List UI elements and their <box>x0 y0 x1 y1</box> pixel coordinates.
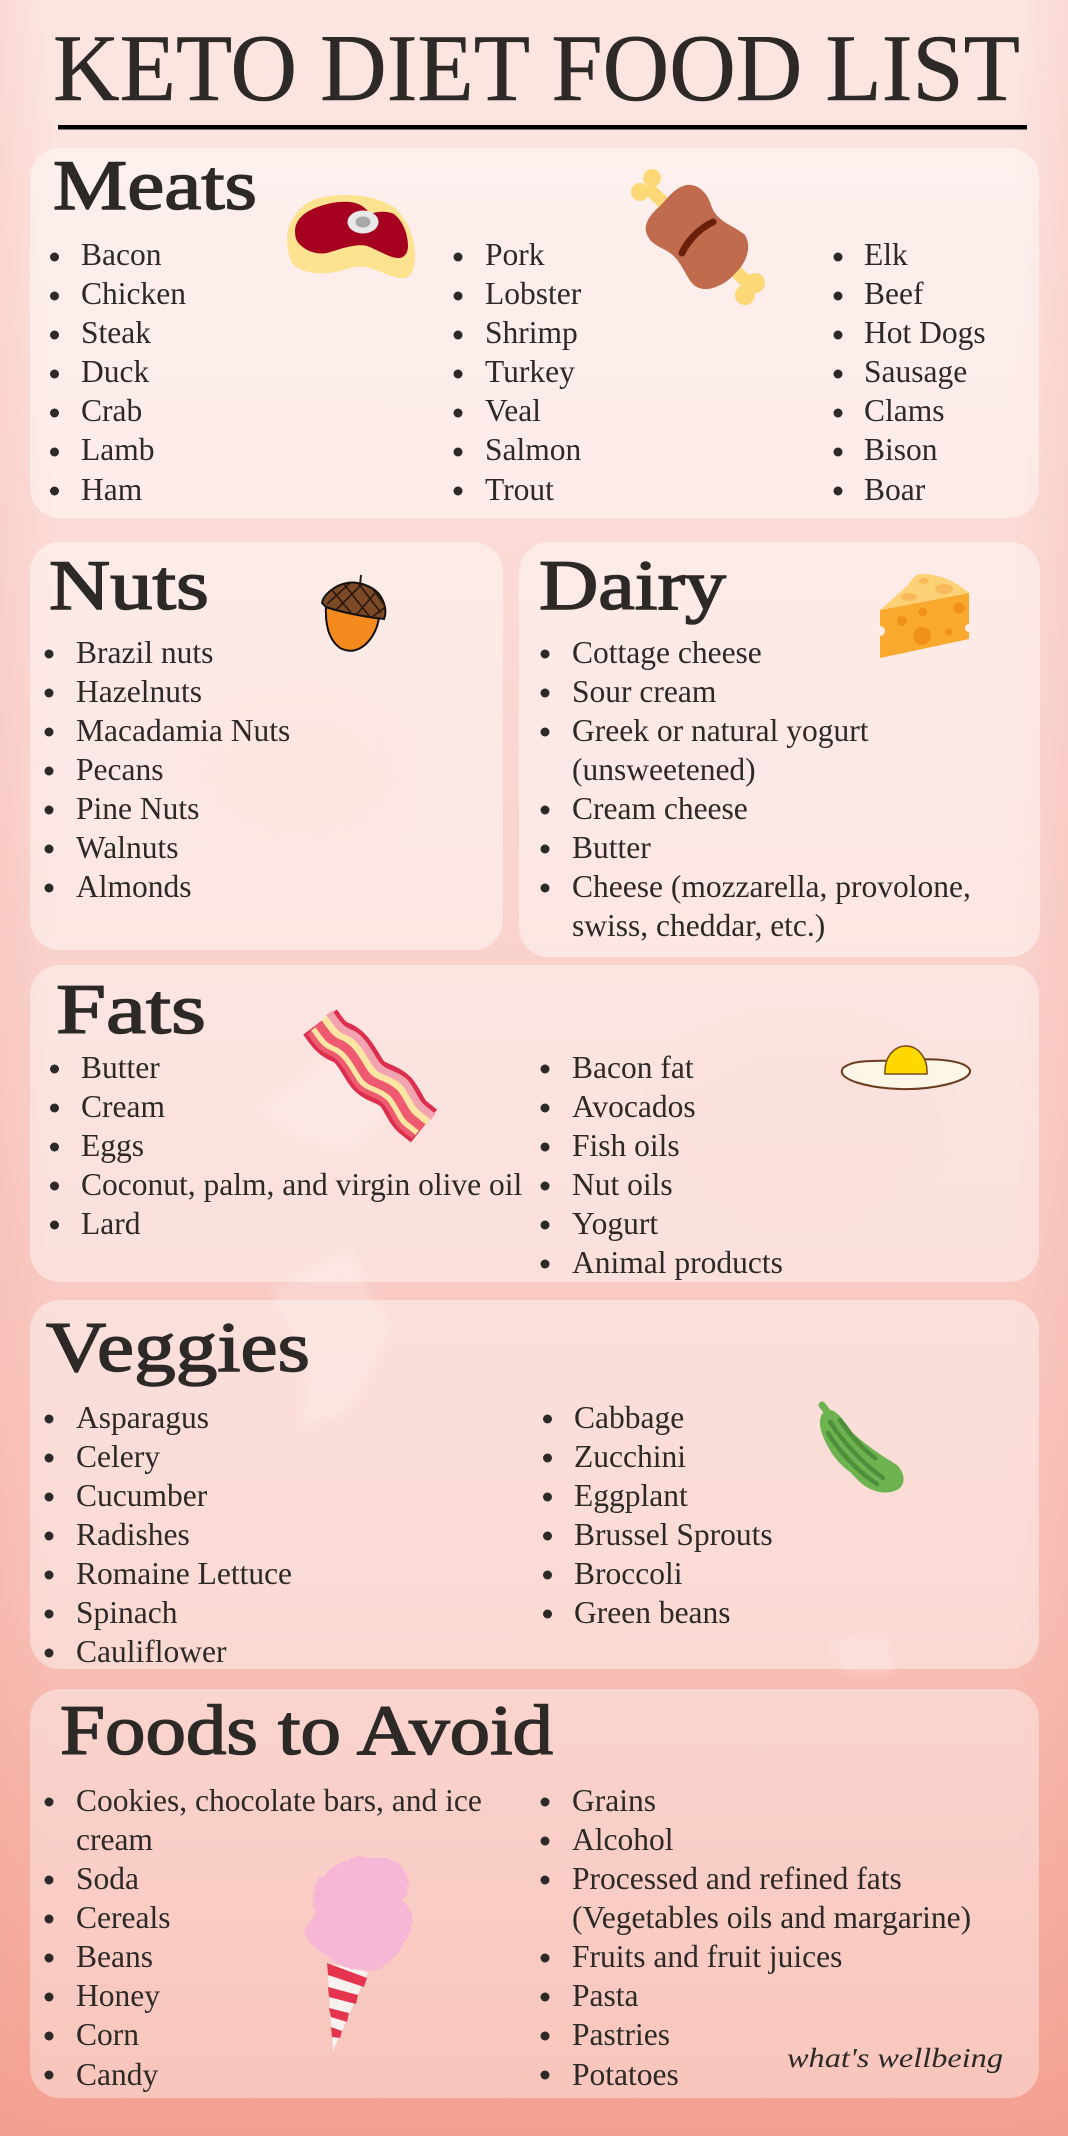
list: veggies column 2: Broccoli <box>574 1556 683 1591</box>
list: meats column 3: Hot Dogs <box>864 315 986 350</box>
list: foods to avoid column 1: Soda <box>76 1861 139 1896</box>
list: foods to avoid column 1: Corn <box>76 2017 139 2052</box>
list: foods to avoid column 1 <box>44 1783 482 2092</box>
heading: fats: Fats <box>56 971 206 1049</box>
list: nuts <box>44 635 290 904</box>
list: veggies column 2 <box>543 1400 773 1630</box>
list: meats column 3 <box>834 237 986 507</box>
list: nuts: Brazil nuts <box>76 635 213 670</box>
list: dairy: (unsweetened) <box>572 752 756 787</box>
icon: cucumber <box>820 1405 904 1492</box>
list: foods to avoid column 2: Pastries <box>572 2017 670 2052</box>
list: veggies column 2: Zucchini <box>574 1439 686 1474</box>
list: meats column 1: Lamb <box>81 432 154 467</box>
icon: bacon <box>310 1013 433 1136</box>
list: dairy <box>540 635 971 943</box>
list: nuts: Macadamia Nuts <box>76 713 290 748</box>
list: foods to avoid column 1: Honey <box>76 1978 160 2013</box>
list: meats column 1 <box>50 237 186 507</box>
list: meats column 3: Sausage <box>864 354 967 389</box>
list: foods to avoid column 1: cream <box>76 1822 153 1857</box>
list: dairy: Cheese (mozzarella, provolone, <box>572 869 971 904</box>
list: nuts: Pine Nuts <box>76 791 199 826</box>
icon: fried egg <box>842 1046 970 1089</box>
icon: steak <box>287 195 415 278</box>
list: meats column 1: Duck <box>81 354 149 389</box>
panel: meats <box>30 147 1039 518</box>
list: meats column 2: Lobster <box>485 276 582 311</box>
heading: meats: Meats <box>53 147 257 225</box>
heading: nuts: Nuts <box>49 547 209 625</box>
list: fats column 2: Nut oils <box>572 1167 673 1202</box>
list: foods to avoid column 2: Potatoes <box>572 2057 679 2092</box>
list: foods to avoid column 2: Processed and refined fats <box>572 1861 902 1896</box>
list: fats column 1 <box>50 1050 522 1241</box>
list: nuts: Almonds <box>76 869 192 904</box>
icon: acorn <box>322 575 385 651</box>
title: KETO DIET FOOD LIST <box>53 15 1020 121</box>
list: fats column 2: Fish oils <box>572 1128 680 1163</box>
list: meats column 3: Bison <box>864 432 938 467</box>
icon: meat on bone <box>631 169 765 305</box>
list: fats column 1: Cream <box>81 1089 165 1124</box>
list: veggies column 1: Cauliflower <box>76 1634 227 1669</box>
list: fats column 1: Eggs <box>81 1128 144 1163</box>
list: meats column 1: Chicken <box>81 276 186 311</box>
list: meats column 2: Pork <box>485 237 545 272</box>
list: dairy: swiss, cheddar, etc.) <box>572 908 825 943</box>
list: foods to avoid column 2 <box>540 1783 971 2092</box>
signature: what's wellbeing <box>787 2043 1003 2073</box>
list: meats column 3: Clams <box>864 393 945 428</box>
title underline <box>58 125 1027 130</box>
list: nuts: Hazelnuts <box>76 674 202 709</box>
list: fats column 1: Coconut, palm, and virgin olive oil <box>81 1167 522 1202</box>
list: dairy: Butter <box>572 830 651 865</box>
list: meats column 2: Salmon <box>485 432 582 467</box>
heading: veggies: Veggies <box>46 1309 310 1387</box>
list: veggies column 2: Eggplant <box>574 1478 688 1513</box>
list: meats column 1: Crab <box>81 393 142 428</box>
list: veggies column 2: Brussel Sprouts <box>574 1517 773 1552</box>
list: meats column 3: Boar <box>864 472 926 507</box>
list: veggies column 1 <box>44 1400 292 1669</box>
panel: fats <box>30 965 1039 1282</box>
list: fats column 2: Animal products <box>572 1245 783 1280</box>
list: veggies column 1: Asparagus <box>76 1400 209 1435</box>
list: veggies column 1: Spinach <box>76 1595 178 1630</box>
list: nuts: Walnuts <box>76 830 178 865</box>
list: veggies column 2: Cabbage <box>574 1400 684 1435</box>
list: fats column 2 <box>540 1050 783 1280</box>
list: fats column 2: Avocados <box>572 1089 696 1124</box>
list: veggies column 1: Romaine Lettuce <box>76 1556 292 1591</box>
list: foods to avoid column 1: Cereals <box>76 1900 170 1935</box>
list: dairy: Greek or natural yogurt <box>572 713 869 748</box>
list: meats column 1: Bacon <box>81 237 162 272</box>
list: foods to avoid column 1: Beans <box>76 1939 153 1974</box>
list: meats column 2: Veal <box>485 393 541 428</box>
panel: foods to avoid <box>30 1689 1039 2098</box>
list: veggies column 2: Green beans <box>574 1595 731 1630</box>
list: nuts: Pecans <box>76 752 163 787</box>
icon: cotton candy <box>305 1856 413 2051</box>
list: foods to avoid column 1: Cookies, chocolate bars, and ice <box>76 1783 482 1818</box>
panel: nuts <box>30 542 503 950</box>
heading: foods to avoid: Foods to Avoid <box>60 1692 553 1770</box>
list: foods to avoid column 2: Pasta <box>572 1978 639 2013</box>
list: foods to avoid column 1: Candy <box>76 2057 158 2092</box>
heading: dairy: Dairy <box>539 547 727 625</box>
list: foods to avoid column 2: Grains <box>572 1783 656 1818</box>
panel: dairy <box>519 542 1040 957</box>
list: dairy: Sour cream <box>572 674 717 709</box>
list: dairy: Cottage cheese <box>572 635 762 670</box>
panel: veggies <box>30 1300 1039 1669</box>
list: meats column 2: Shrimp <box>485 315 578 350</box>
list: meats column 1: Steak <box>81 315 151 350</box>
list: meats column 2: Trout <box>485 472 554 507</box>
icon: cheese <box>875 574 973 658</box>
list: meats column 2 <box>454 237 582 507</box>
list: meats column 3: Beef <box>864 276 924 311</box>
list: foods to avoid column 2: Alcohol <box>572 1822 674 1857</box>
list: meats column 3: Elk <box>864 237 908 272</box>
list: fats column 1: Butter <box>81 1050 160 1085</box>
list: veggies column 1: Celery <box>76 1439 160 1474</box>
list: dairy: Cream cheese <box>572 791 748 826</box>
list: foods to avoid column 2: (Vegetables oils and margarine) <box>572 1900 971 1935</box>
list: veggies column 1: Radishes <box>76 1517 190 1552</box>
list: meats column 1: Ham <box>81 472 143 507</box>
list: fats column 2: Yogurt <box>572 1206 658 1241</box>
list: foods to avoid column 2: Fruits and fruit juices <box>572 1939 842 1974</box>
list: fats column 1: Lard <box>81 1206 141 1241</box>
list: veggies column 1: Cucumber <box>76 1478 208 1513</box>
list: meats column 2: Turkey <box>485 354 575 389</box>
list: fats column 2: Bacon fat <box>572 1050 694 1085</box>
